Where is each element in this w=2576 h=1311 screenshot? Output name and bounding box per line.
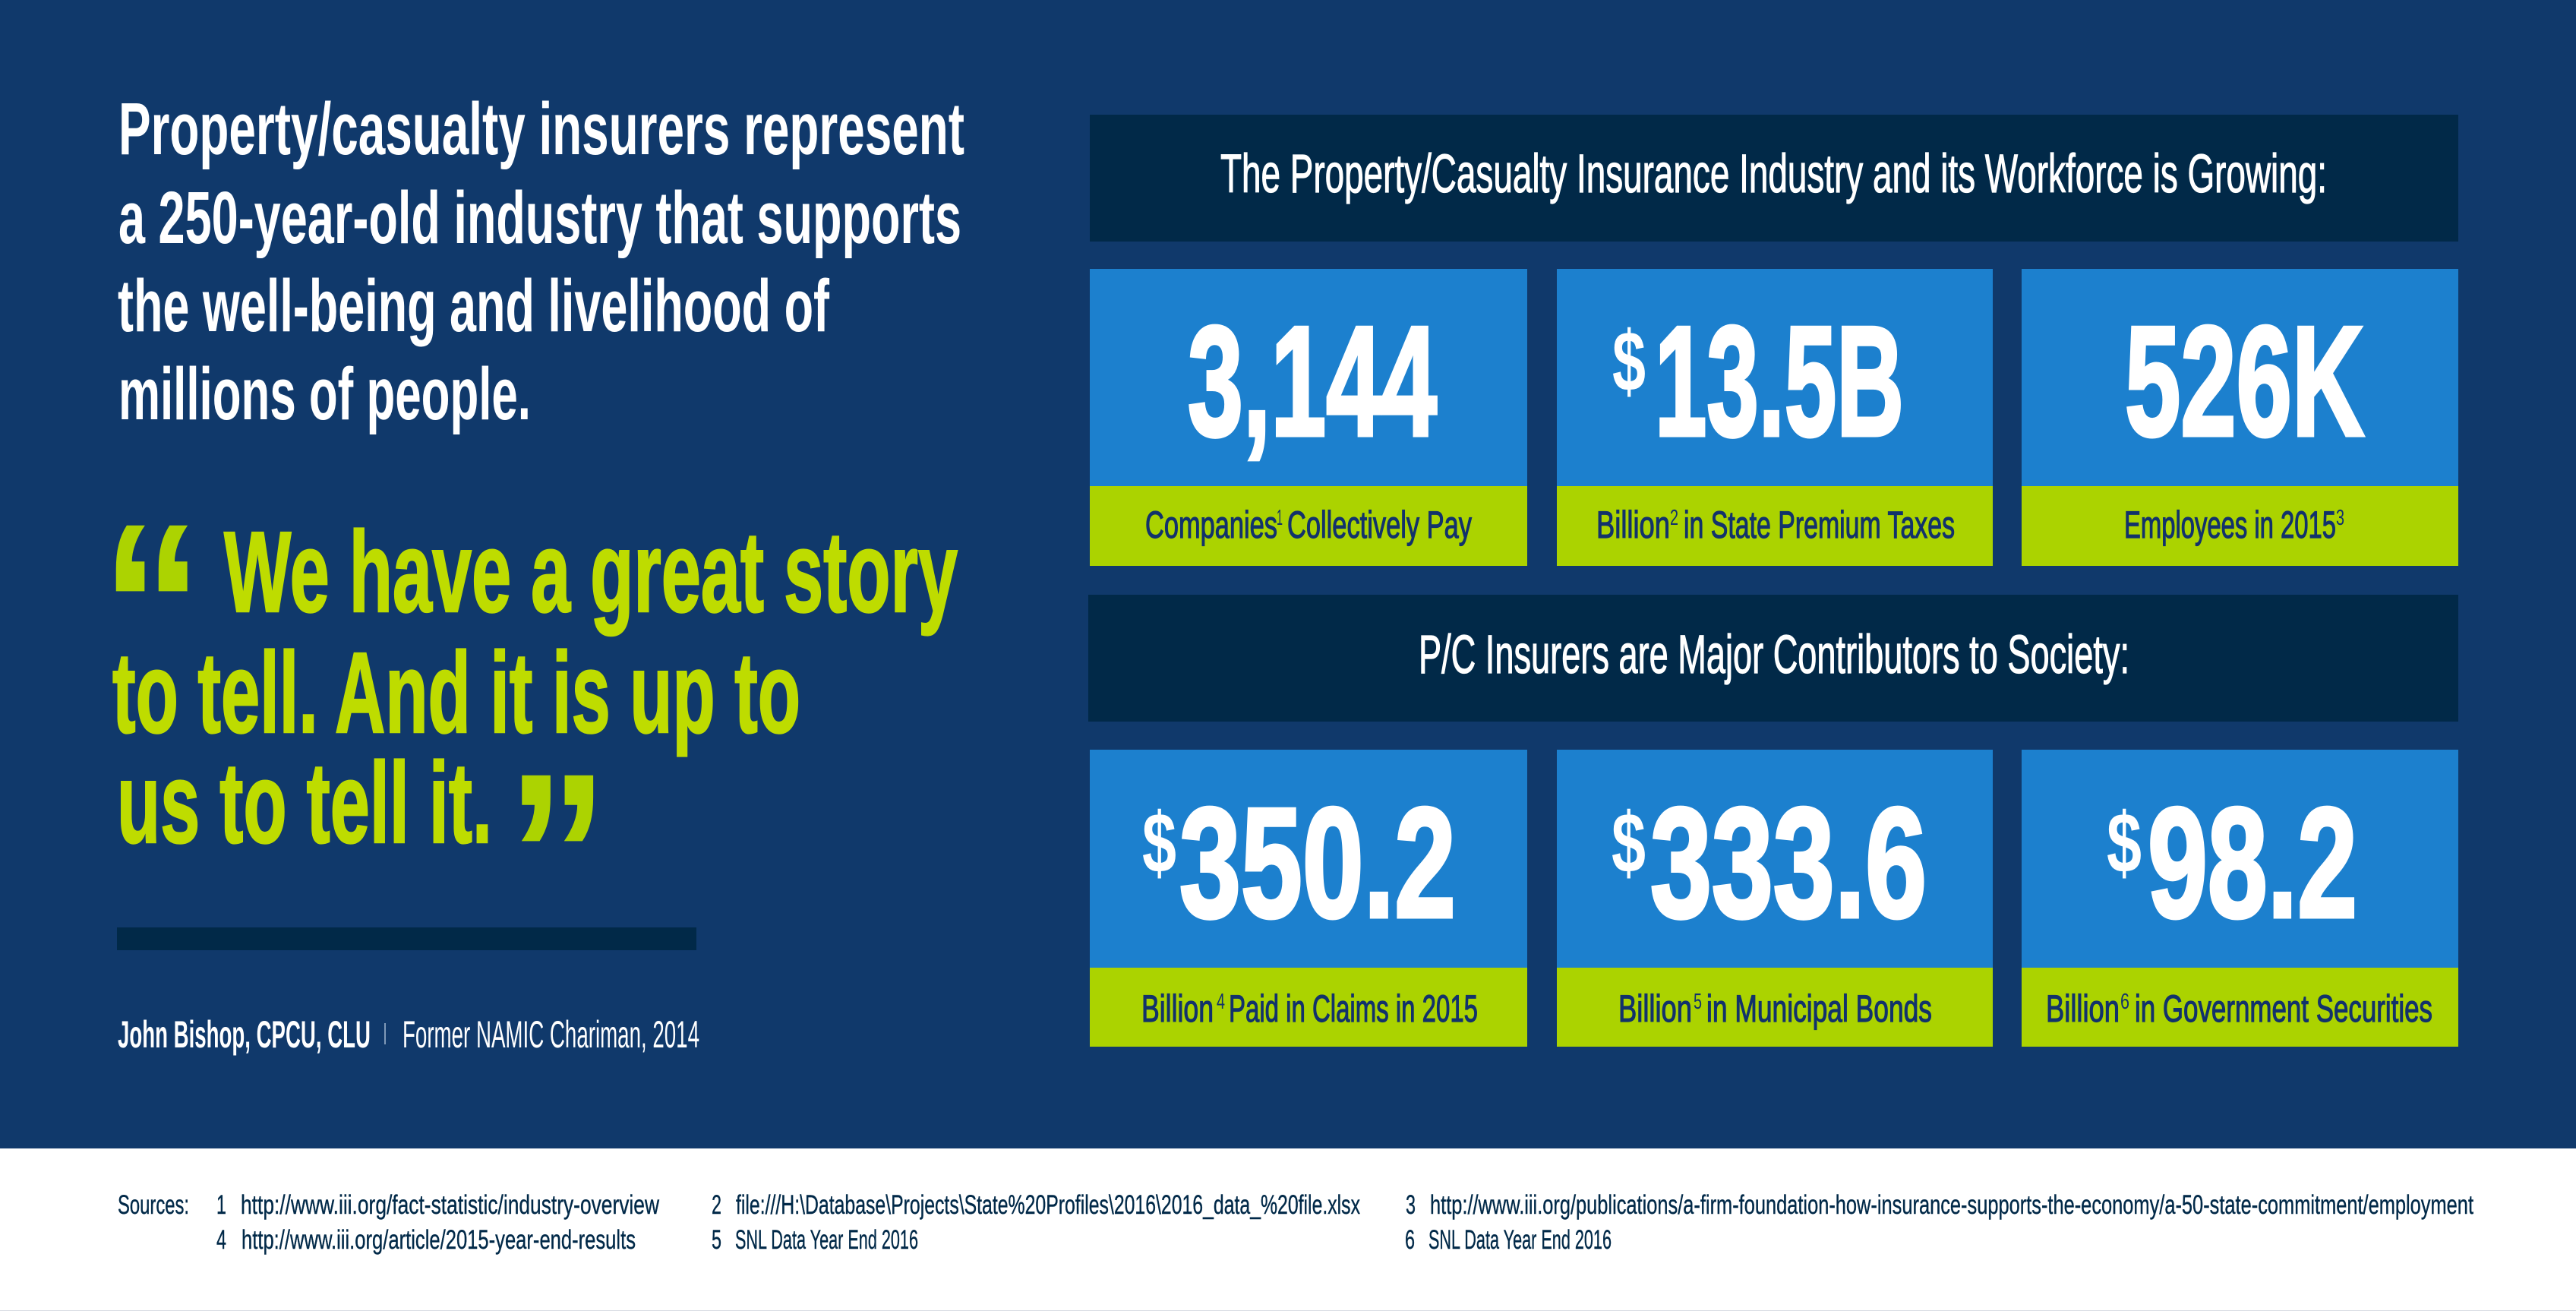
sources footer: 5 [712, 1225, 721, 1255]
header: major contributors: P/C Insurers are Major Contributors to Society: [1419, 625, 2129, 685]
card: $350.2 claims: Billion [1141, 987, 1214, 1030]
card: $333.6 municipal bonds: Billion [1618, 987, 1692, 1030]
card: $13.5B premium taxes: Billion [1596, 504, 1670, 546]
card: $350.2 claims: $ [1142, 795, 1176, 890]
card: 526K employees: Employees in 2015 [2124, 504, 2336, 546]
card: 526K employees: 526K [2125, 294, 2364, 469]
pull quote [101, 475, 958, 986]
left intro text: a 250-year-old industry that supports [118, 176, 961, 259]
left intro text: millions of people. [118, 352, 531, 435]
card: 3,144 companies: Companies [1145, 504, 1277, 546]
sources footer: http://www.iii.org/fact-statistic/industry-overview [241, 1190, 660, 1220]
card: $98.2 government securities: in Government Securities [2135, 987, 2432, 1030]
card: $98.2 government securities [2022, 750, 2458, 1047]
sources footer: 3 [1406, 1190, 1416, 1220]
card: $13.5B premium taxes: $ [1612, 314, 1646, 409]
card: $13.5B premium taxes [1557, 269, 1993, 566]
quote text [112, 507, 958, 867]
card: $13.5B premium taxes: in State Premium Taxes [1684, 504, 1955, 546]
card: $333.6 municipal bonds: $ [1612, 795, 1646, 890]
card: $333.6 municipal bonds: in Municipal Bonds [1706, 987, 1932, 1030]
card: 3,144 companies [1090, 269, 1527, 566]
sources footer: 4 [216, 1225, 226, 1255]
card: $98.2 government securities: $ [2107, 795, 2142, 890]
sources footer: file:///H:\Database\Projects\State%20Profiles\2016\2016_data_%20file.xlsx [736, 1190, 1360, 1220]
left intro text: Property/casualty insurers represent [118, 87, 964, 170]
card: 3,144 companies: Collectively Pay [1287, 504, 1472, 546]
sources footer [0, 1148, 2576, 1311]
closing quotation mark: ” [507, 725, 608, 986]
opening quotation mark: “ [101, 475, 203, 736]
sources footer: 2 [712, 1190, 721, 1220]
card: 3,144 companies: 3,144 [1188, 294, 1437, 469]
sources footer: SNL Data Year End 2016 [735, 1225, 918, 1255]
card: $333.6 municipal bonds [1557, 750, 1993, 1047]
card: $98.2 government securities: 98.2 [2148, 776, 2357, 950]
sources footer: 6 [1405, 1225, 1415, 1255]
sources footer: Sources: [118, 1190, 189, 1220]
left intro text [118, 87, 964, 435]
quote divider bar [117, 927, 696, 950]
quote text: us to tell it. [117, 738, 492, 867]
sources footer: SNL Data Year End 2016 [1428, 1225, 1612, 1255]
attribution: John Bishop, CPCU, CLU [118, 1013, 371, 1056]
quote text: to tell. And it is up to [112, 628, 800, 757]
left intro text: the well-being and livelihood of [118, 264, 829, 347]
card: $350.2 claims: Paid in Claims in 2015 [1229, 987, 1478, 1030]
sources footer: 1 [216, 1190, 226, 1220]
card: $13.5B premium taxes: 2 [1670, 506, 1678, 530]
card: $350.2 claims: 4 [1217, 990, 1225, 1014]
card: 526K employees: 3 [2336, 506, 2344, 530]
header: major contributors [1088, 595, 2458, 722]
card: $350.2 claims [1090, 750, 1527, 1047]
quote text: We have a great story [224, 507, 958, 636]
card: $333.6 municipal bonds: 333.6 [1650, 776, 1927, 950]
sources footer: http://www.iii.org/article/2015-year-end-results [242, 1225, 636, 1255]
attribution: Former NAMIC Chariman, 2014 [402, 1013, 699, 1056]
card: $13.5B premium taxes: 13.5B [1655, 294, 1904, 469]
card: $98.2 government securities: 6 [2120, 990, 2129, 1014]
header: industry growing [1090, 115, 2458, 242]
card: 526K employees [2022, 269, 2458, 566]
card: $98.2 government securities: Billion [2046, 987, 2120, 1030]
card: $333.6 municipal bonds: 5 [1694, 990, 1702, 1014]
card: 3,144 companies: 1 [1277, 506, 1283, 530]
card: $350.2 claims: 350.2 [1179, 776, 1456, 950]
